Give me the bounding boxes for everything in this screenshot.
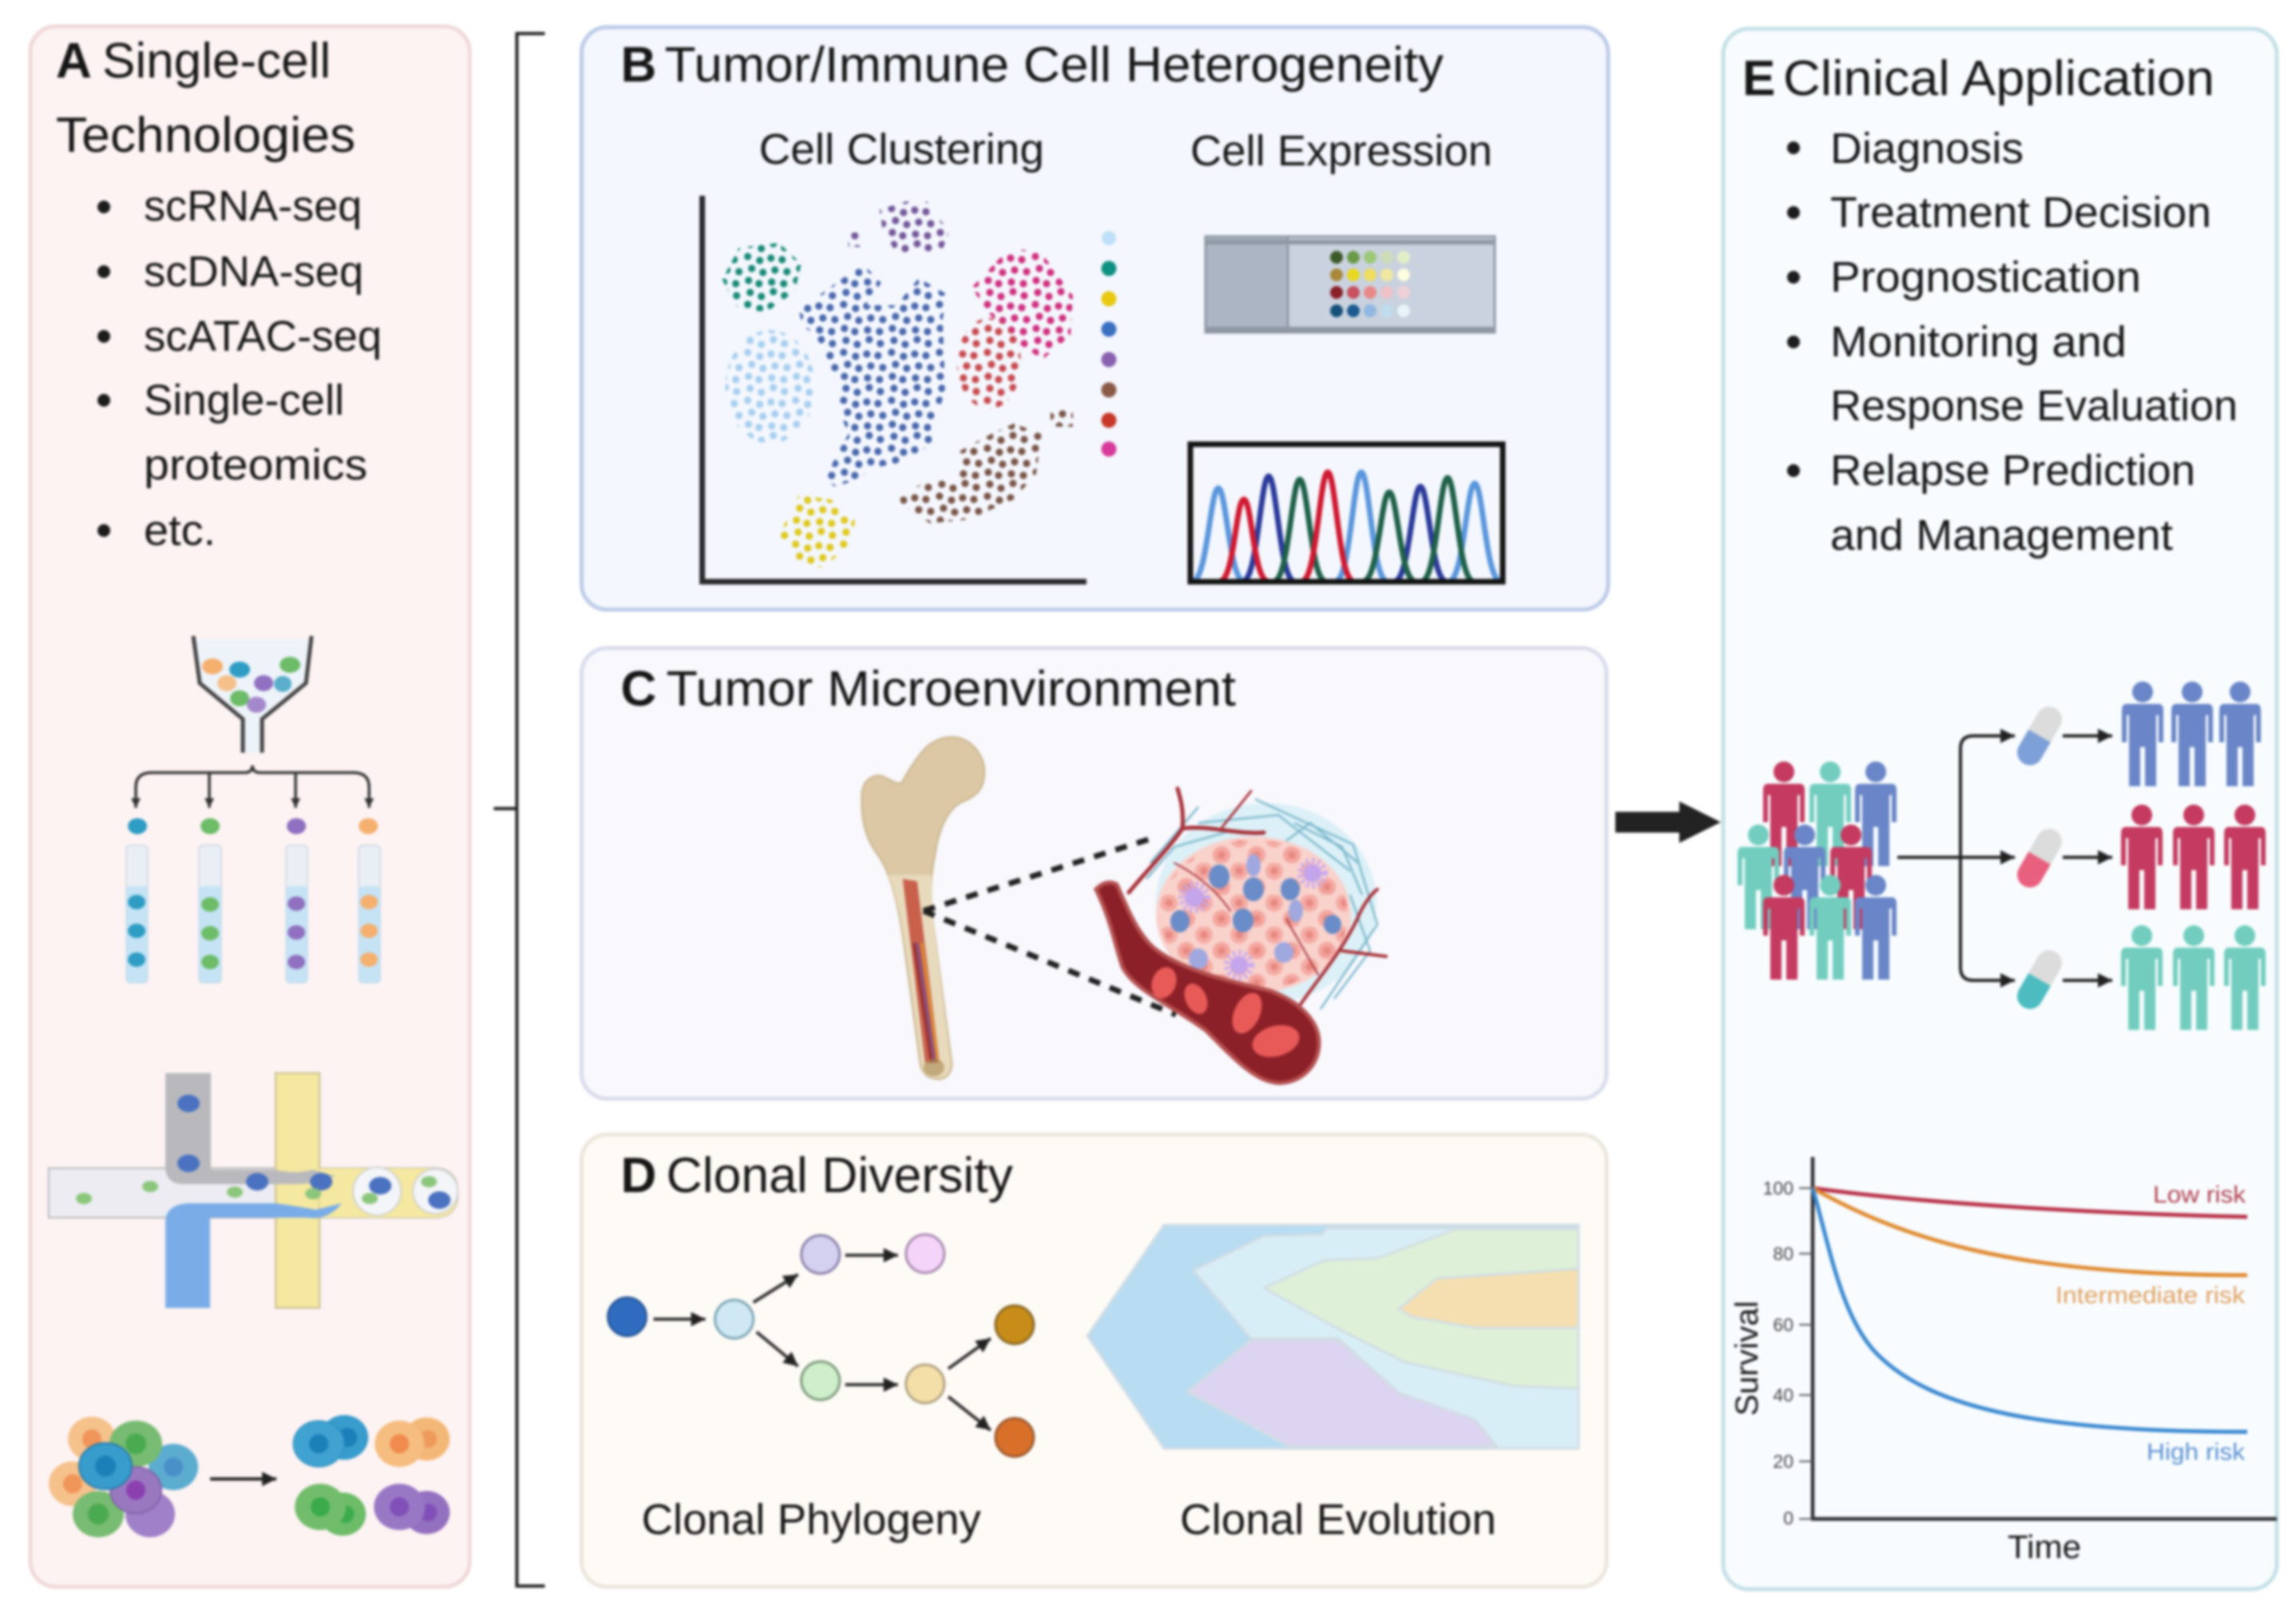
technology list: proteomics	[144, 441, 367, 489]
label: clonal phylogeny: Clonal Phylogeny	[642, 1496, 981, 1544]
chart: cell clustering scatter	[702, 196, 1117, 582]
icon: funnel sorting cells into tubes	[126, 636, 380, 983]
panel E: clinical application	[1723, 29, 2277, 1589]
chart: survival curves: 100	[1763, 1178, 1794, 1199]
chart: survival curves: 0	[1783, 1508, 1794, 1528]
heading A: Technologies	[56, 108, 356, 163]
icon: teal capsule	[2012, 945, 2067, 1014]
heading E: Clinical Application	[1783, 51, 2215, 106]
heading C: Tumor Microenvironment	[666, 662, 1236, 717]
clinical uses list: Relapse Prediction	[1830, 447, 2195, 495]
heading B: B	[621, 38, 657, 93]
panel A: single-cell technologies	[30, 26, 470, 1587]
icon: mixed patient crowd	[1738, 761, 1897, 980]
label: clonal evolution: Clonal Evolution	[1180, 1496, 1496, 1544]
chart: survival curves: 40	[1773, 1385, 1794, 1405]
technology list: scRNA-seq	[144, 182, 362, 230]
technology list	[97, 182, 382, 555]
clinical uses list	[1787, 125, 2238, 559]
panel B: tumor and immune cell heterogeneity	[582, 27, 1608, 610]
icon: red capsule	[2012, 824, 2067, 892]
icon: teal patient group	[2121, 925, 2266, 1030]
label: cell expression: Cell Expression	[1190, 127, 1492, 175]
chart: survival curves: 60	[1773, 1314, 1794, 1335]
chart: survival curves: 80	[1773, 1243, 1794, 1264]
heading A: A	[56, 34, 92, 89]
heading E: E	[1742, 51, 1775, 106]
heading A	[56, 34, 356, 163]
technology list: Single-cell	[144, 376, 344, 424]
clinical uses list: Treatment Decision	[1830, 189, 2211, 237]
diagram: clonal phylogeny tree	[608, 1234, 1034, 1457]
chart: survival curves: Survival	[1730, 1301, 1765, 1416]
illustration: tumor tissue and blood vessel	[1096, 789, 1386, 1083]
icon: blue patient group	[2122, 682, 2261, 786]
clinical uses list: Prognostication	[1830, 253, 2141, 301]
arrows: branching to three treatments	[1897, 736, 2112, 980]
chart: survival curves: High risk	[2147, 1439, 2246, 1465]
dashed zoom lines from bone to tumor tissue	[924, 837, 1176, 1015]
chart: clonal evolution fish plot	[1087, 1225, 1579, 1449]
heading D: Clonal Diversity	[666, 1148, 1013, 1203]
icon: blue capsule	[2012, 702, 2067, 770]
heading D: D	[621, 1148, 657, 1203]
bracket joining panels B, C and D	[494, 34, 545, 1586]
clinical uses list: and Management	[1830, 511, 2173, 559]
icon: mixed cells separated into groups	[49, 1415, 450, 1537]
chart: survival curves	[1730, 1157, 2277, 1565]
icon: microfluidic droplet channel	[49, 1073, 458, 1308]
chart: survival curves: Time	[2008, 1528, 2081, 1565]
panel C: tumor microenvironment	[582, 648, 1607, 1099]
heading A: Single-cell	[102, 34, 331, 89]
panel D: clonal diversity	[582, 1135, 1607, 1587]
icon: red patient group	[2121, 805, 2266, 909]
heading C: C	[621, 662, 657, 717]
clinical uses list: Response Evaluation	[1830, 382, 2238, 430]
heading B: Tumor/Immune Cell Heterogeneity	[665, 38, 1444, 93]
chart: sequencing chromatogram	[1190, 444, 1503, 582]
clinical uses list: Monitoring and	[1830, 318, 2127, 366]
diagram: patient stratification and treatment	[1738, 682, 2266, 1030]
technology list: etc.	[144, 507, 216, 555]
arrow from biology panels to clinical application	[1615, 801, 1721, 843]
icon: expression array slide	[1206, 237, 1495, 332]
chart: survival curves: Intermediate risk	[2056, 1282, 2246, 1309]
chart: survival curves: Low risk	[2153, 1182, 2246, 1208]
chart: survival curves: 20	[1773, 1451, 1794, 1472]
technology list: scATAC-seq	[144, 312, 382, 360]
label: cell clustering: Cell Clustering	[759, 125, 1044, 173]
clinical uses list: Diagnosis	[1830, 125, 2024, 173]
technology list: scDNA-seq	[144, 248, 363, 296]
icon: femur bone with marrow	[862, 737, 984, 1079]
